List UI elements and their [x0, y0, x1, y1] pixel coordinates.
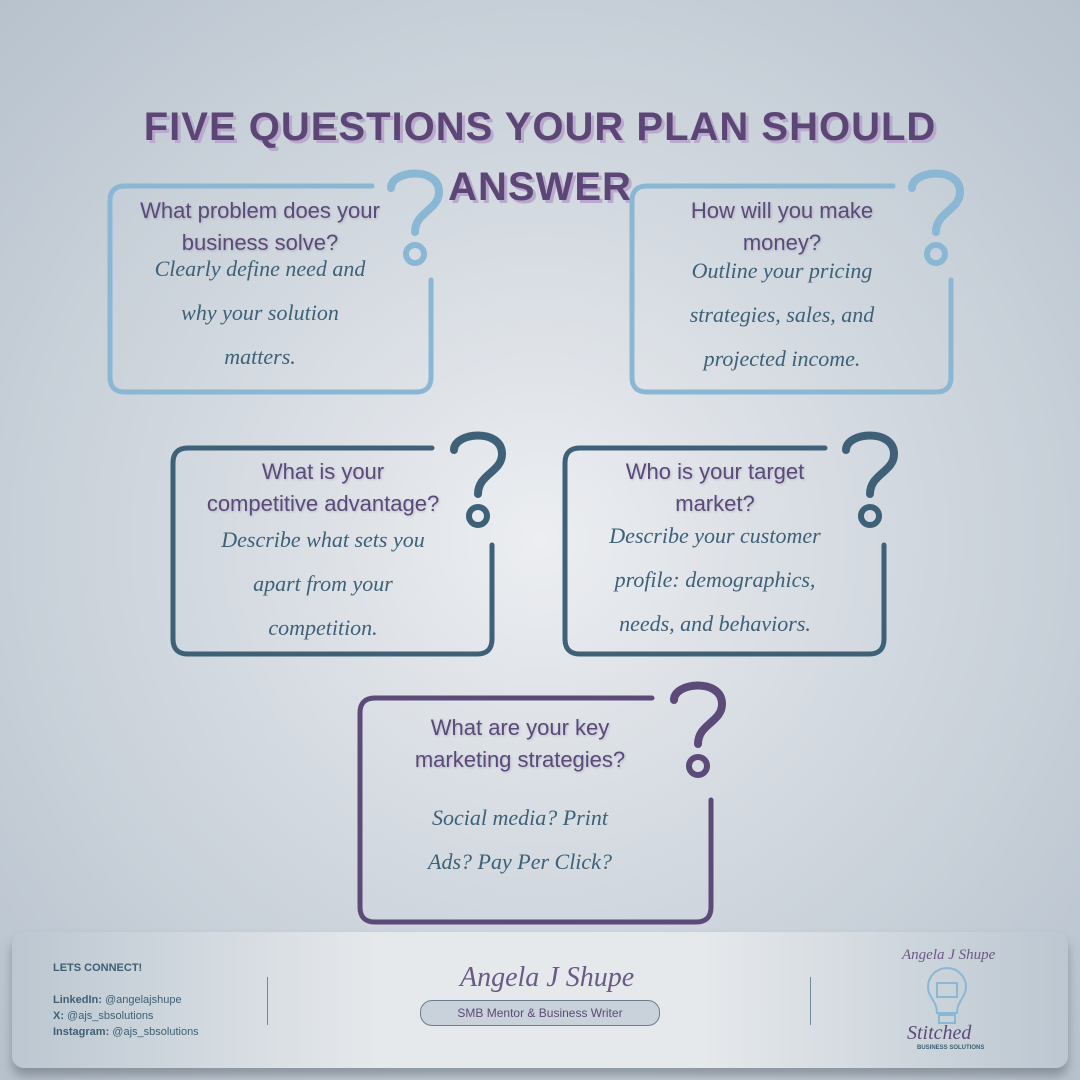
box 2 text: [690, 198, 874, 371]
logo: [901, 947, 995, 1051]
box 4 text: [609, 459, 821, 636]
contact info: LETS CONNECT!: [53, 962, 142, 974]
box 1 text: why your solution: [181, 300, 339, 325]
box 4 text: needs, and behaviors.: [619, 611, 811, 636]
box 4 text: Who is your target: [626, 459, 804, 484]
logo: Angela J Shupe: [902, 947, 995, 963]
contact info: Instagram: @ajs_sbsolutions: [53, 1026, 199, 1038]
box 1 text: Clearly define need and: [155, 256, 365, 281]
box 2 text: money?: [743, 230, 821, 255]
box 3 text: What is your: [262, 459, 384, 484]
box 2 text: Outline your pricing: [692, 258, 872, 283]
box 2 text: strategies, sales, and: [690, 302, 874, 327]
box 5 text: What are your key: [431, 715, 609, 740]
logo: Stitched: [907, 1022, 971, 1044]
box 4: [565, 436, 894, 654]
signature badge: [420, 962, 660, 1026]
title: FIVE QUESTIONS YOUR PLAN SHOULD: [144, 105, 936, 149]
box 3: [173, 436, 502, 654]
box 3 text: Describe what sets you: [221, 527, 425, 552]
box 1 text: What problem does your: [140, 198, 380, 223]
contact info: LinkedIn: @angelajshupe: [53, 994, 182, 1006]
signature badge: SMB Mentor & Business Writer: [457, 1006, 623, 1020]
box 5: [360, 686, 722, 922]
box 1 text: business solve?: [182, 230, 338, 255]
logo: BUSINESS SOLUTIONS: [917, 1045, 984, 1051]
box 1: [110, 174, 439, 392]
title: ANSWER: [448, 165, 632, 209]
box 5 text: [415, 715, 626, 874]
box 5 text: marketing strategies?: [415, 747, 625, 772]
box 5 text: Social media? Print: [432, 805, 608, 830]
box 4 text: market?: [675, 491, 755, 516]
box 2 text: How will you make: [691, 198, 873, 223]
box 1 text: [140, 198, 380, 369]
box 2: [632, 174, 960, 392]
box 4 text: profile: demographics,: [615, 567, 815, 592]
box 3 text: [207, 459, 440, 640]
box 3 text: apart from your: [253, 571, 393, 596]
signature badge: Angela J Shupe: [460, 962, 634, 993]
box 4 text: Describe your customer: [609, 523, 821, 548]
title: [144, 105, 936, 209]
box 3 text: competition.: [268, 615, 378, 640]
box 5 text: Ads? Pay Per Click?: [428, 849, 612, 874]
box 2 text: projected income.: [704, 346, 860, 371]
box 1 text: matters.: [224, 344, 296, 369]
box 3 text: competitive advantage?: [207, 491, 439, 516]
footer panel: [12, 932, 1068, 1068]
contact info: X: @ajs_sbsolutions: [53, 1010, 153, 1022]
contact info: [53, 962, 199, 1038]
